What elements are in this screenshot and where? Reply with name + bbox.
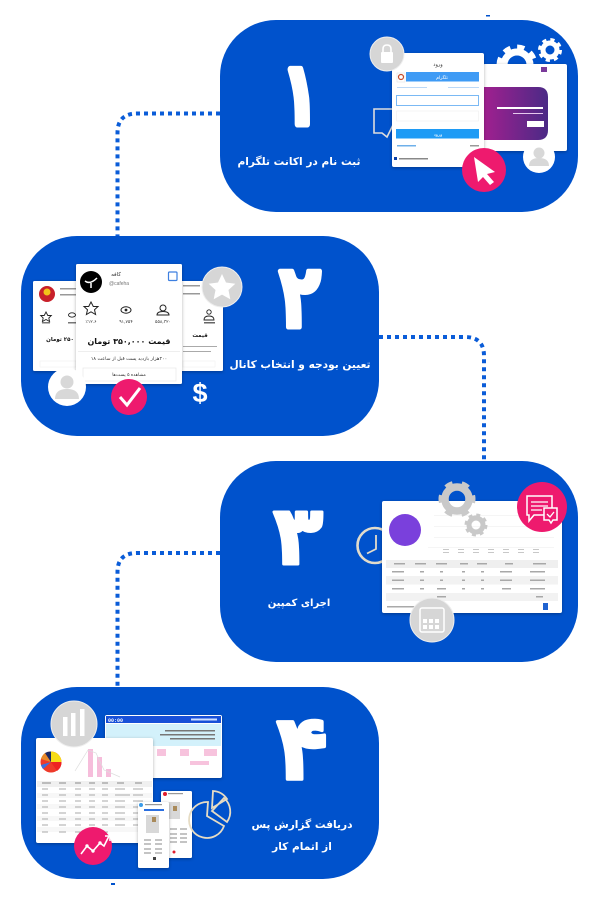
bar chart	[88, 749, 111, 777]
center channel card: ۵۵۸,۳۲۰	[155, 319, 171, 325]
chart axis labels	[443, 549, 539, 553]
channel avatar	[80, 271, 102, 293]
step 4 heading second line: از اتمام کار	[271, 841, 332, 853]
dashboard card	[382, 501, 562, 613]
center channel card: ۲۰۰هزار بازدید پست قبل از ساعت ۱۸	[91, 356, 167, 362]
panel background 1	[220, 20, 578, 212]
back card: banner page	[483, 64, 567, 151]
center channel card: مشاهده ۵ پست‌ها	[112, 373, 146, 378]
pie chart	[40, 751, 62, 772]
icon: pink chat badge	[517, 482, 567, 532]
number 1: ۱	[282, 44, 318, 145]
step 3 heading: اجرای کمپین	[268, 598, 330, 609]
center channel card: ٪۱۲.۶	[85, 320, 97, 325]
icon: large gear	[441, 483, 473, 515]
icon: calendar circle	[410, 598, 454, 642]
post preview card front	[138, 802, 169, 868]
icon: small gear	[466, 515, 486, 535]
report header card	[105, 715, 222, 778]
number 2: ۲	[279, 246, 321, 348]
right channel card: قیمت	[192, 333, 208, 339]
right channel card	[175, 281, 223, 371]
login card	[392, 53, 484, 167]
icon: large gear	[499, 47, 535, 83]
step 4 heading: دریافت گزارش پس	[251, 818, 353, 831]
icon: dollar sign: $	[192, 378, 208, 408]
icon: star circle	[202, 267, 242, 307]
login card: ورود	[433, 62, 443, 68]
center channel card: @cafeha	[109, 281, 129, 287]
panel background 3	[220, 461, 578, 662]
icon: bar chart circle	[51, 701, 97, 747]
icon: person circle	[48, 368, 86, 406]
report header card: 00:00	[108, 718, 123, 724]
icon: pink trend badge	[74, 827, 112, 865]
pagination	[543, 603, 548, 610]
arrow: dotted connector from step 3 to step 4	[118, 553, 220, 687]
step 2 heading: تعیین بودجه و انتخاب کانال	[229, 359, 371, 371]
chart grid	[428, 515, 554, 548]
panel: step 3 run campaign	[220, 461, 578, 662]
number 4: ۴	[276, 696, 328, 801]
checkbox	[168, 272, 177, 280]
login card: تلگرام	[436, 74, 449, 81]
panel background 2	[21, 236, 379, 436]
panel background 4	[21, 687, 379, 879]
panel: step 1 sign up	[220, 20, 578, 212]
center channel card: ۹۱,۷۵۴	[119, 320, 133, 325]
purple donut	[389, 514, 421, 546]
icon: small gear	[540, 40, 560, 60]
arrow: dotted connector from step 1 to step 2	[118, 114, 220, 236]
icon: person circle	[523, 141, 555, 173]
price: قیمت ۳۵۰,۰۰۰ تومان	[87, 337, 171, 346]
post preview card back	[161, 791, 192, 858]
arrow: dotted connector from step 2 to step 3	[379, 337, 484, 461]
login card: ورود	[434, 133, 442, 138]
icon: pink check badge	[111, 379, 147, 415]
left channel card	[33, 281, 83, 371]
left channel card: ۲۵۰ تومان	[46, 337, 74, 343]
table	[386, 560, 558, 610]
icon: clock	[358, 528, 392, 563]
number 3: ۳	[273, 489, 323, 584]
purple banner	[484, 87, 548, 140]
analytics card	[36, 738, 153, 843]
center channel card: کافه	[111, 271, 121, 278]
icon: pie chart outline	[189, 791, 230, 838]
center channel card	[76, 264, 182, 384]
panel: step 2 budget and channel	[21, 236, 379, 436]
step 1 heading: ثبت نام در اکانت تلگرام	[238, 155, 360, 168]
panel: step 4 final report	[21, 687, 379, 879]
icon: pink cursor badge	[462, 148, 506, 192]
icon: speech bubble outline	[374, 109, 393, 137]
report table	[37, 781, 152, 832]
icon: lock circle	[370, 37, 404, 71]
